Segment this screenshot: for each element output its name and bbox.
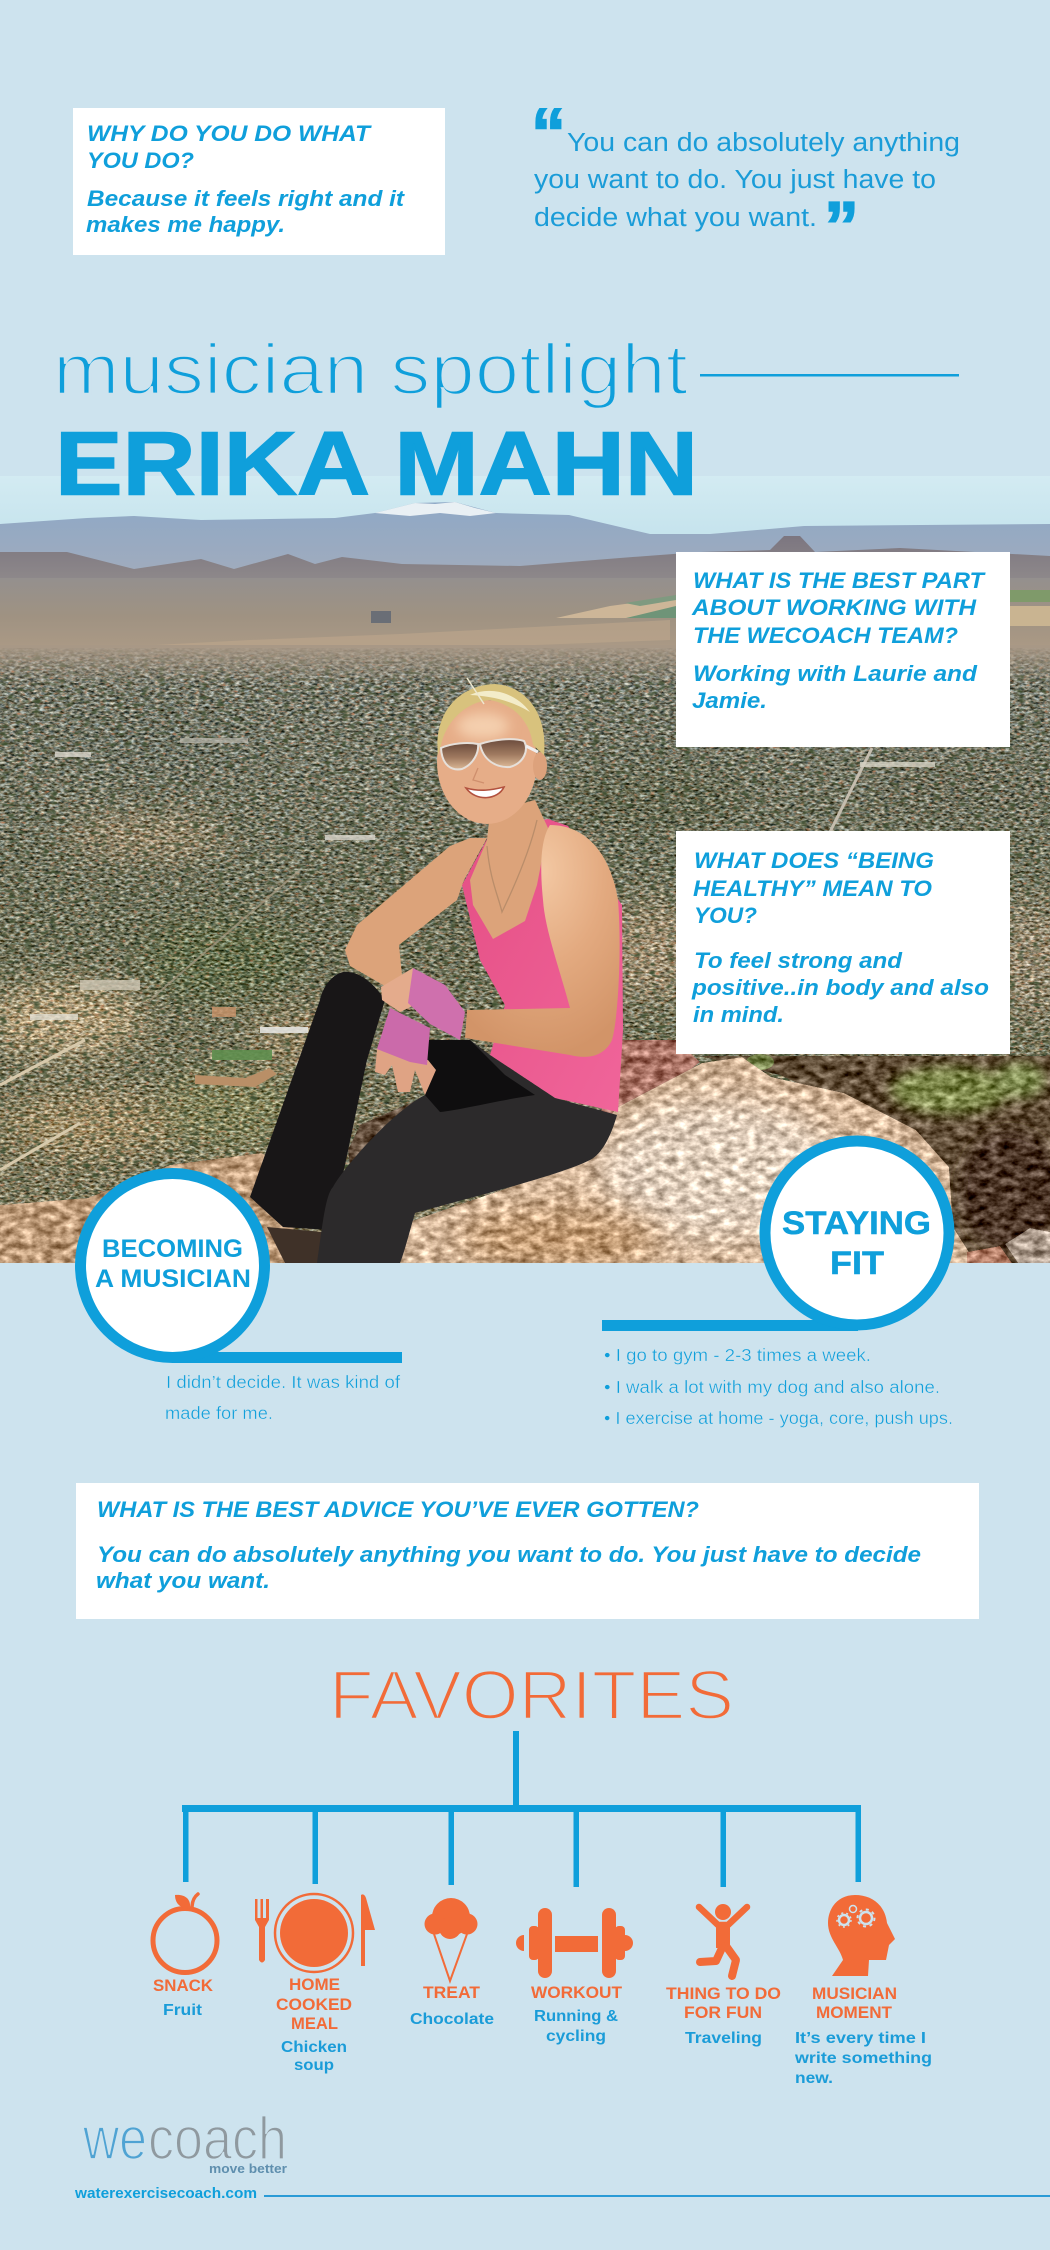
favorite: home cooked meal xyxy=(276,1976,352,2074)
logo coach: coach xyxy=(148,2105,287,2172)
chest and neck xyxy=(470,800,548,939)
underline bar xyxy=(602,1320,858,1331)
label: WORKOUT xyxy=(531,1984,622,2002)
left arm xyxy=(345,838,487,986)
snow cap xyxy=(375,502,496,516)
answer line 2: what you want. xyxy=(96,1568,270,1593)
icon: dumbbell xyxy=(516,1908,633,1978)
shoe xyxy=(267,1227,325,1263)
icon: plate with fork and knife xyxy=(255,1894,375,1972)
upper fingers xyxy=(381,968,425,1012)
label line 2: COOKED xyxy=(276,1996,352,2014)
label line 1: HOME xyxy=(289,1976,340,1994)
small rock lower right xyxy=(967,1228,1050,1263)
rooftop speckle: pale xyxy=(0,650,1050,1210)
question line 2: ABOUT WORKING WITH xyxy=(691,595,977,620)
value: Chocolate xyxy=(410,2011,494,2028)
website link: waterexercisecoach.com xyxy=(74,2186,257,2202)
card xyxy=(73,108,445,255)
question line 3: YOU? xyxy=(694,903,757,928)
suburban valley xyxy=(0,648,1050,1263)
line 2: made for me. xyxy=(165,1403,273,1423)
value: Traveling xyxy=(685,2030,762,2047)
question line 3: THE WECOACH TEAM? xyxy=(693,623,958,648)
distant mountains xyxy=(0,502,1050,569)
back leg xyxy=(250,972,385,1230)
card xyxy=(676,831,1010,1054)
value line 2: write something xyxy=(794,2050,932,2067)
pull quote xyxy=(531,94,960,265)
quote line 2: you want to do. You just have to xyxy=(534,166,936,194)
head xyxy=(437,700,537,824)
answer: You can do absolutely anything you want to do. You just have to decide xyxy=(97,1542,921,1567)
shaded upper thigh xyxy=(425,1040,535,1112)
question: WHAT IS THE BEST PART xyxy=(693,568,986,593)
tank top xyxy=(462,819,623,1112)
near hills xyxy=(0,536,1050,578)
list: staying fit xyxy=(604,1345,953,1428)
value line 2: cycling xyxy=(546,2028,606,2045)
item 1: • I go to gym - 2-3 times a week. xyxy=(604,1345,871,1365)
right arm xyxy=(465,825,620,1057)
circle xyxy=(765,1141,949,1325)
value line 3: new. xyxy=(795,2070,833,2087)
label line 2: MOMENT xyxy=(816,2004,892,2022)
value: Fruit xyxy=(163,2002,202,2019)
farm fields xyxy=(162,590,1050,645)
answer line 2: positive..in body and also xyxy=(691,975,989,1000)
upper glove xyxy=(408,968,465,1040)
red rock behind xyxy=(602,1040,700,1114)
sky xyxy=(0,476,1050,546)
main leg xyxy=(317,1040,617,1263)
tree connector xyxy=(182,1731,861,1887)
value line 1: Running & xyxy=(534,2008,618,2025)
label: SNACK xyxy=(153,1977,213,1995)
icon: fruit xyxy=(153,1894,217,1972)
label: TREAT xyxy=(423,1984,480,2002)
tagline: move better xyxy=(209,2161,287,2176)
label line 1: STAYING xyxy=(782,1205,931,1241)
dark hillside right xyxy=(700,1054,1050,1263)
trees speckle xyxy=(0,650,1050,1210)
question second line: YOU DO? xyxy=(87,148,194,173)
answer: Because it feels right and it xyxy=(87,186,406,211)
label line 3: MEAL xyxy=(291,2015,338,2033)
sunglasses xyxy=(441,739,538,769)
opening quote mark: “ xyxy=(531,94,566,172)
answer: Working with Laurie and xyxy=(693,661,978,686)
favorite: snack xyxy=(153,1977,213,2019)
rooftop speckle: terracotta xyxy=(0,650,1050,1210)
ear xyxy=(533,752,547,780)
text: becoming a musician xyxy=(165,1372,400,1423)
item 3: • I exercise at home - yoga, core, push ups. xyxy=(604,1408,953,1428)
roads and estates xyxy=(0,738,935,1170)
question card: best advice xyxy=(76,1483,979,1619)
smile xyxy=(466,787,504,798)
hair xyxy=(437,684,544,755)
line 1: I didn’t decide. It was kind of xyxy=(166,1372,400,1392)
loose strand xyxy=(467,678,484,704)
value line 1: Chicken xyxy=(281,2039,347,2056)
lower glove xyxy=(377,1008,430,1065)
icon: jumping person xyxy=(699,1904,747,1976)
quote line 3: decide what you want. xyxy=(534,204,817,232)
question: WHY DO YOU DO WHAT xyxy=(87,121,372,146)
answer: To feel strong and xyxy=(694,948,903,973)
answer line 3: in mind. xyxy=(693,1002,784,1027)
label line 1: MUSICIAN xyxy=(812,1985,897,2003)
haze where plain meets suburbs xyxy=(0,645,1050,685)
question: WHAT DOES “BEING xyxy=(694,848,934,873)
boulder xyxy=(400,1057,969,1263)
favorite: treat xyxy=(410,1984,494,2028)
answer second line: makes me happy. xyxy=(86,212,285,237)
lower hand xyxy=(375,1049,436,1095)
label line 1: BECOMING xyxy=(102,1235,243,1263)
quote line 1: You can do absolutely anything xyxy=(567,129,960,157)
badge: staying fit xyxy=(602,1141,949,1331)
label line 2: FIT xyxy=(830,1245,885,1281)
value line 1: It’s every time I xyxy=(795,2030,926,2047)
forehead highlight xyxy=(457,713,509,739)
favorite: thing to do for fun xyxy=(666,1985,781,2047)
logo we: we xyxy=(82,2105,147,2172)
scrub behind the knee xyxy=(348,1100,416,1164)
favorite: musician moment xyxy=(794,1985,932,2087)
hair highlight xyxy=(470,691,530,712)
label line 1: THING TO DO xyxy=(666,1985,781,2003)
label line 2: FOR FUN xyxy=(684,2004,762,2022)
underline bar xyxy=(172,1352,402,1363)
card xyxy=(676,552,1010,747)
question card: being healthy xyxy=(676,831,1010,1054)
question card: best part of the team xyxy=(676,552,1010,747)
desert plain xyxy=(0,578,1050,645)
favorite: workout xyxy=(531,1984,622,2045)
title: musician spotlight: musician spotlight xyxy=(53,331,688,410)
question line 2: HEALTHY” MEAN TO xyxy=(693,876,932,901)
question card: why do you do what you do xyxy=(73,108,445,255)
value line 2: soup xyxy=(294,2057,334,2074)
circle xyxy=(80,1174,264,1358)
answer line 2: Jamie. xyxy=(692,688,767,713)
person xyxy=(250,678,623,1263)
title: name: ERIKA MAHN xyxy=(55,414,698,514)
heading: favorites: FAVORITES xyxy=(329,1656,734,1734)
logo: wecoach xyxy=(82,2105,287,2176)
item 2: • I walk a lot with my dog and also alone. xyxy=(604,1377,940,1397)
label line 2: A MUSICIAN xyxy=(95,1265,251,1293)
question: WHAT IS THE BEST ADVICE YOU’VE EVER GOTTEN? xyxy=(97,1497,699,1522)
badge: becoming a musician xyxy=(80,1174,402,1363)
hero photo: woman sitting on a rock above the valley xyxy=(0,476,1050,1270)
closing quote mark: ” xyxy=(824,187,859,265)
necklace xyxy=(487,820,537,912)
icon: ice cream cone xyxy=(424,1898,478,1981)
left rock xyxy=(0,1153,300,1263)
card xyxy=(76,1483,979,1619)
nose shade xyxy=(473,768,484,783)
icon: head with gears xyxy=(828,1895,895,1976)
